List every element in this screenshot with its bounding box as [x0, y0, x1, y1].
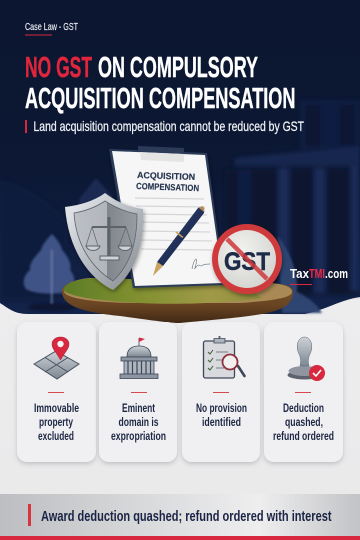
brand: .com	[325, 267, 348, 281]
scales of justice	[86, 217, 132, 260]
card text	[273, 403, 334, 443]
brand: Tax	[290, 267, 309, 281]
card text: Deduction	[283, 403, 324, 415]
card text: expropriation	[111, 431, 166, 443]
card text: domain is	[118, 417, 158, 429]
icon: stamp with check	[288, 337, 325, 381]
clipboard clip	[138, 146, 184, 153]
illustration: clipboard document	[109, 146, 225, 288]
card: deduction quashed	[264, 322, 343, 462]
illustration: no GST sign: GST	[224, 248, 270, 276]
card: no provision	[182, 322, 260, 462]
illustration: platform	[62, 278, 293, 323]
document text lines	[135, 198, 212, 250]
background courthouse	[225, 100, 360, 295]
card text: Immovable	[34, 403, 79, 415]
document heading: ACQUISITION	[137, 170, 195, 182]
card text	[111, 403, 166, 443]
illustration: pen	[153, 206, 204, 276]
card text: excluded	[38, 431, 74, 443]
background tree left	[24, 234, 76, 311]
card text	[34, 403, 79, 443]
dark hero panel	[0, 0, 360, 314]
card text: quashed,	[285, 417, 323, 429]
title	[25, 52, 296, 115]
card text: identified	[202, 417, 241, 429]
illustration: no GST sign	[212, 224, 282, 294]
card text: refund ordered	[273, 431, 334, 443]
title: NO GST	[25, 52, 92, 84]
card text: No provision	[196, 403, 247, 415]
card text	[196, 403, 247, 429]
icon: capitol building	[120, 338, 158, 378]
brand: TMI	[309, 267, 325, 281]
kicker: Case Law - GST	[25, 21, 78, 33]
card text: Eminent	[122, 403, 155, 415]
brand	[290, 267, 348, 285]
card: immovable property	[17, 322, 96, 462]
signature	[192, 259, 210, 269]
card text: property	[39, 417, 73, 429]
card: eminent domain	[99, 322, 177, 462]
title: ON COMPULSORY	[98, 52, 258, 84]
background tree right	[278, 236, 322, 313]
footer band	[0, 494, 360, 540]
icon: checklist with magnifier	[204, 336, 244, 378]
document heading	[136, 170, 199, 193]
document heading: COMPENSATION	[136, 181, 199, 193]
background hill	[0, 180, 70, 300]
kicker	[25, 21, 78, 36]
illustration: justice shield	[65, 193, 143, 290]
icon: map with pin	[34, 337, 79, 379]
